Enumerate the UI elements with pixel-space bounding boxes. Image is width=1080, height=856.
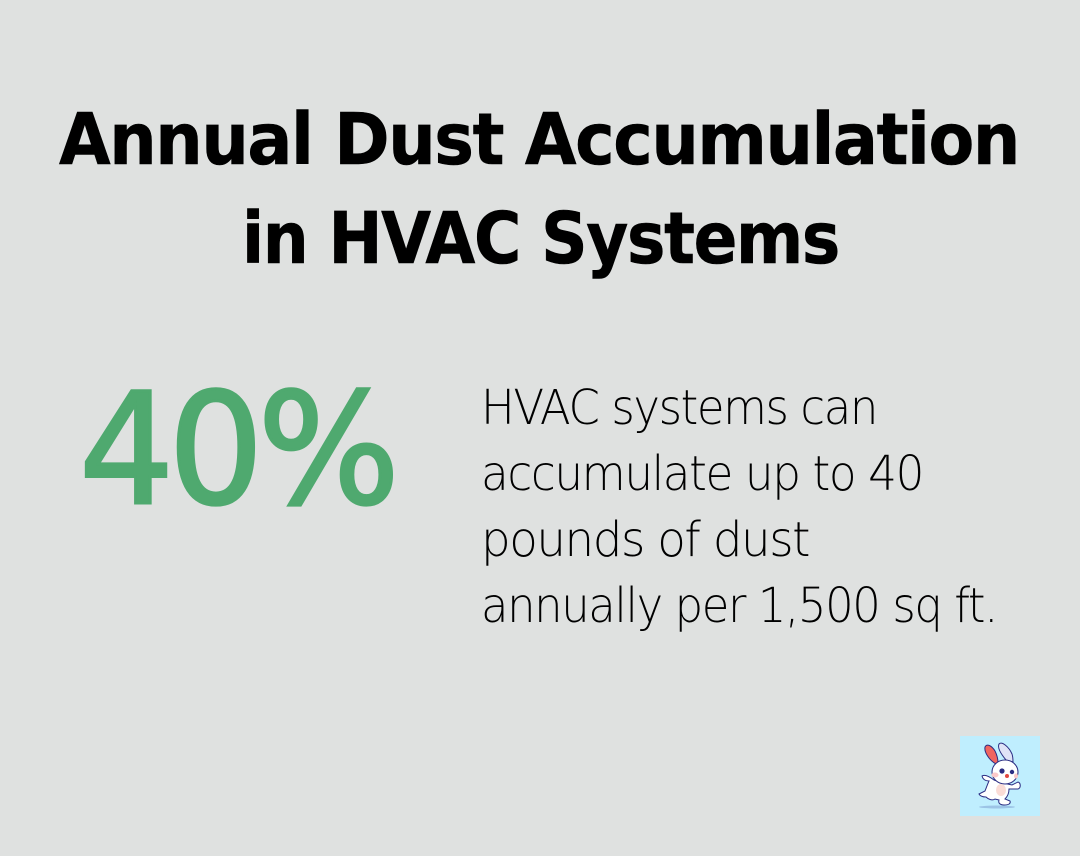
icon: rabbit logo [960, 736, 1040, 816]
description text: accumulate up to 40 [481, 446, 923, 502]
description text: pounds of dust [481, 512, 809, 568]
title: in HVAC Systems [242, 197, 839, 280]
description text [481, 380, 997, 634]
title: Annual Dust Accumulation [59, 98, 1019, 181]
description text: HVAC systems can [481, 380, 877, 436]
statistic: 40%: 40% [79, 361, 394, 540]
description text: annually per 1,500 sq ft. [481, 578, 997, 634]
title [59, 98, 1019, 280]
